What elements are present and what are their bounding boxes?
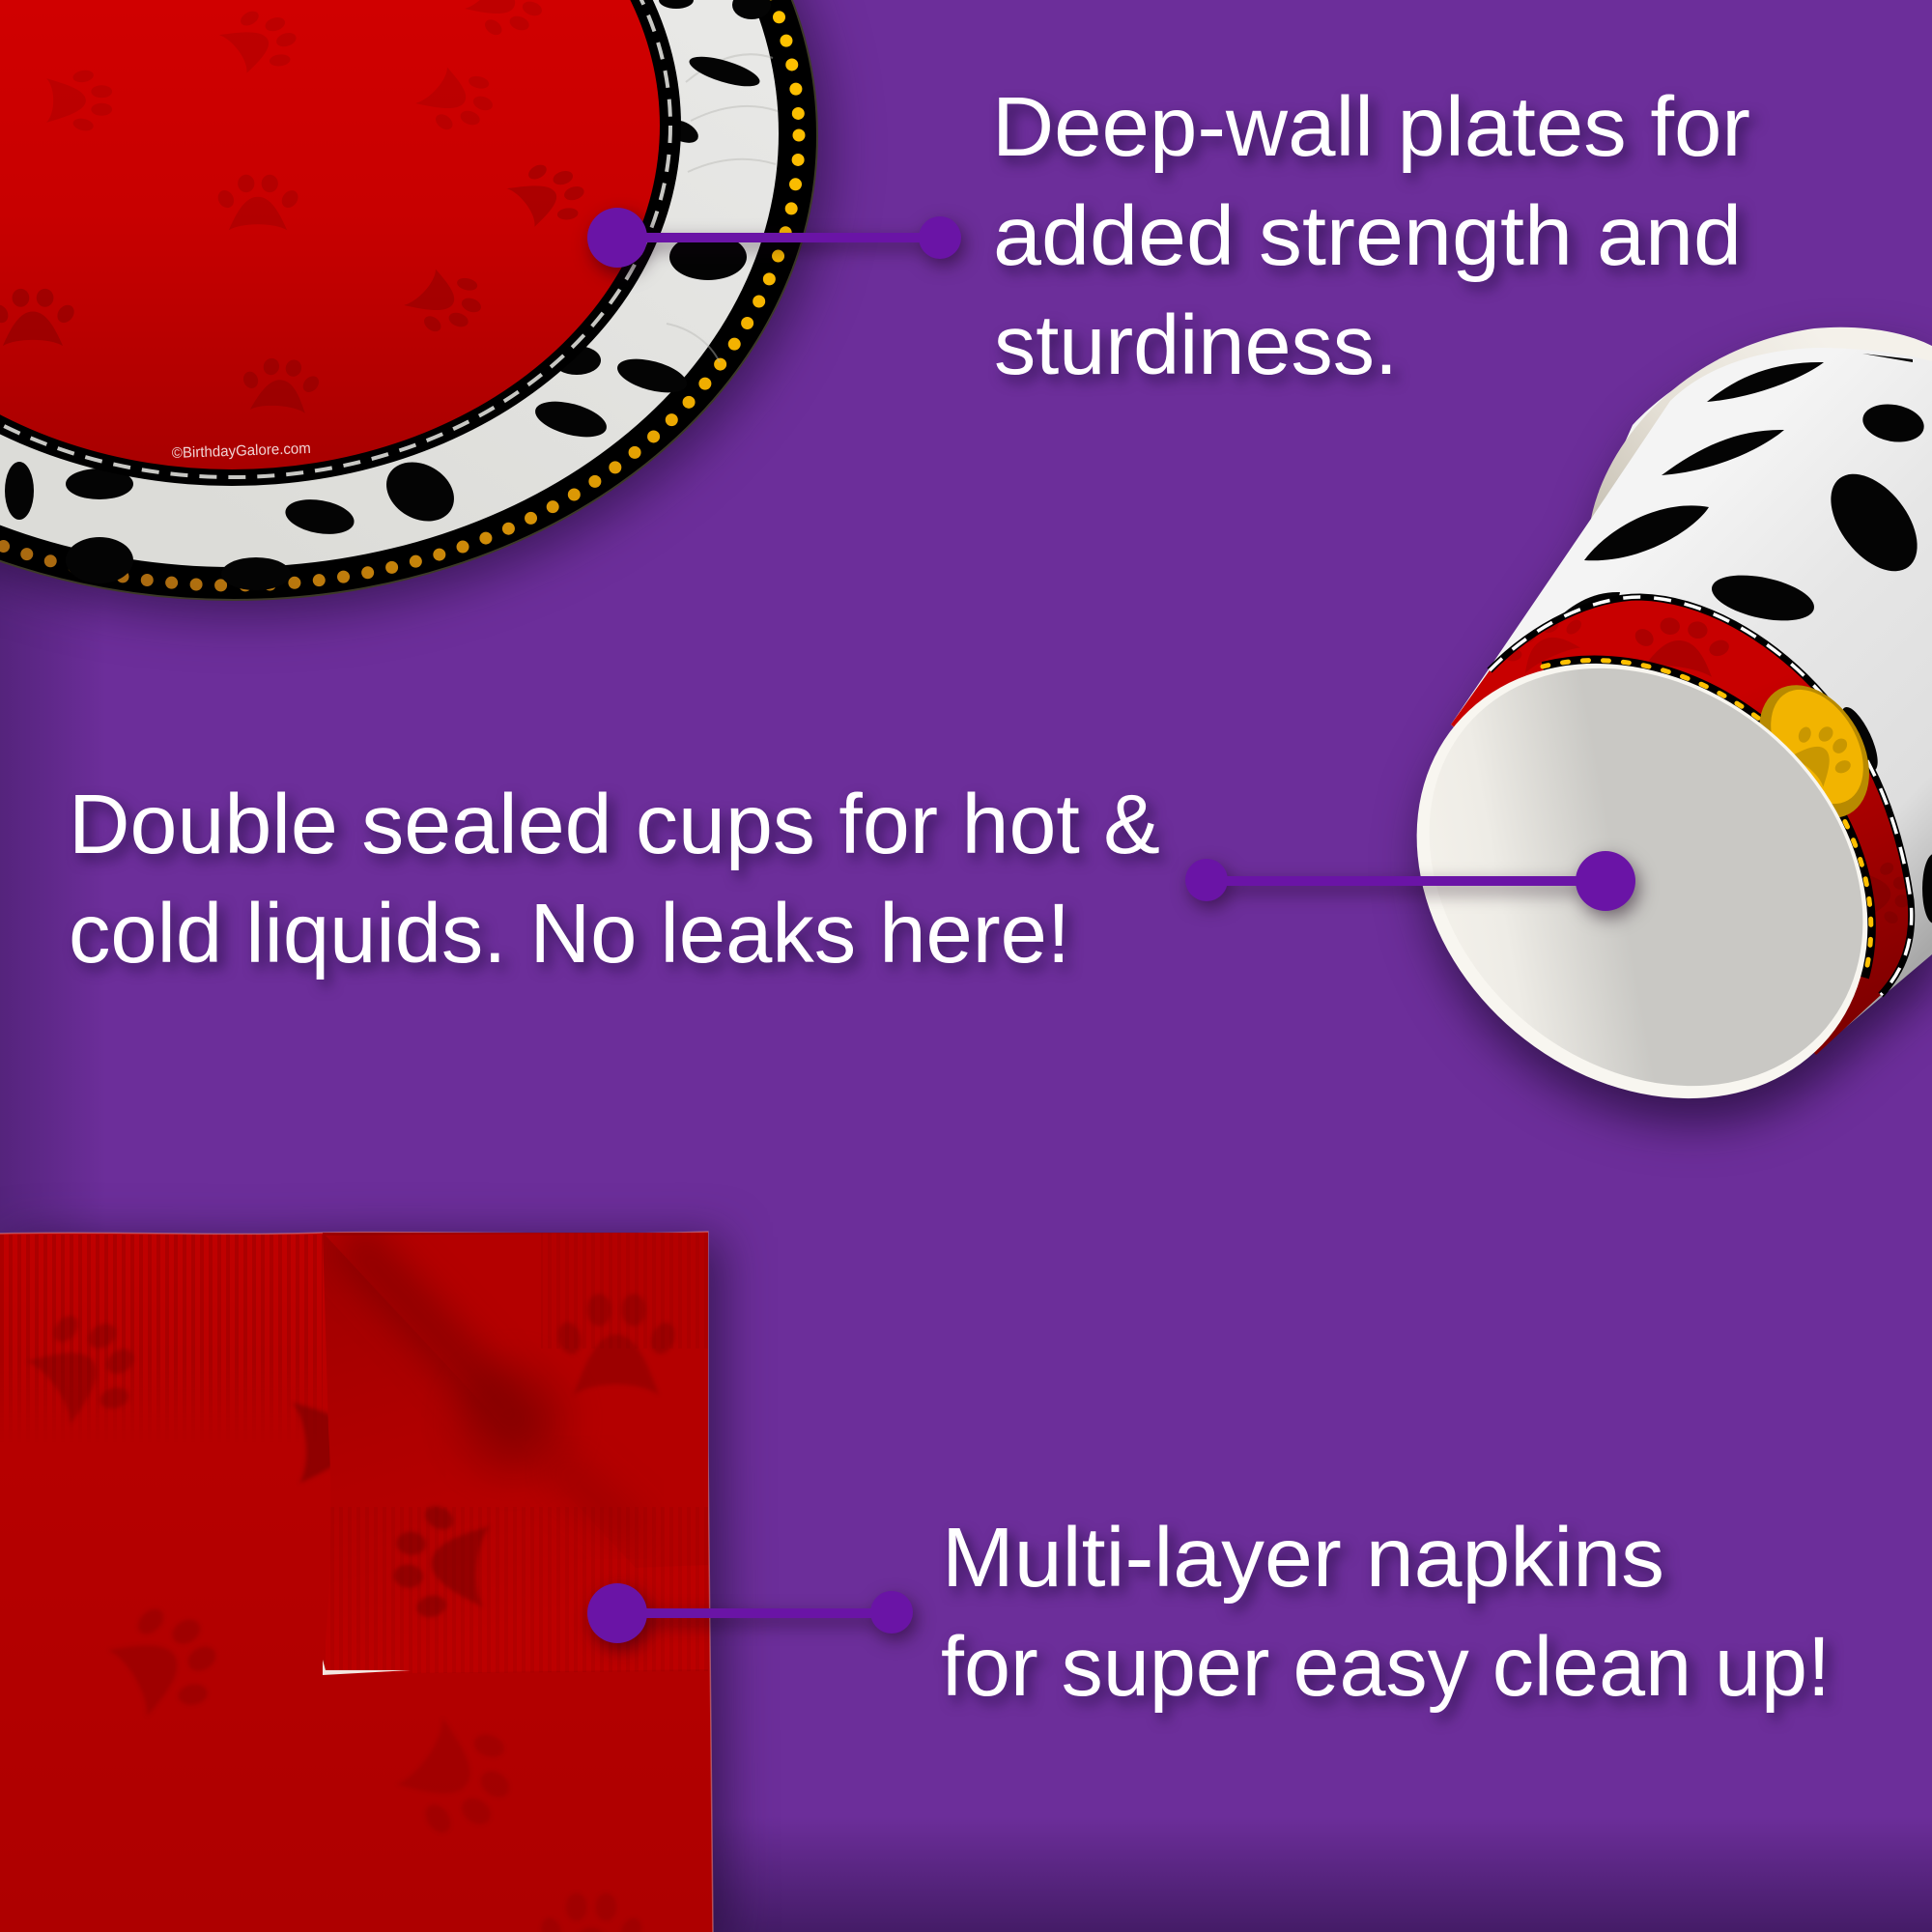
connector: plate (587, 208, 961, 268)
napkin base (0, 1232, 713, 1932)
napkin folded flap (323, 1233, 710, 1676)
cup (1396, 326, 1932, 1150)
napkin flap corner highlight (323, 1660, 411, 1675)
napkin paw prints (16, 1294, 645, 1932)
plate (0, 0, 817, 600)
napkin ribbed band (0, 1235, 323, 1405)
text: napkins: for super easy clean up! (941, 1620, 1831, 1714)
plate dashed stitch (0, 0, 670, 477)
plate red center (0, 0, 660, 469)
text: cups: Double sealed cups for hot & (69, 778, 1160, 871)
cup gold medallion (1737, 666, 1891, 838)
cup interior (1346, 582, 1932, 1173)
cup band stitched edge (1490, 597, 1912, 995)
cup red band (1451, 597, 1912, 1055)
cup top rim (1591, 327, 1932, 519)
cup body (1451, 337, 1932, 1050)
cup black spots (1548, 354, 1932, 923)
plate outer black rim (0, 0, 817, 600)
text: napkins: Multi-layer napkins (942, 1511, 1664, 1605)
plate black spots (5, 0, 771, 590)
text: plates: sturdiness. (994, 298, 1398, 392)
text: cups: cold liquids. No leaks here! (69, 887, 1070, 980)
text: plates (992, 80, 1750, 392)
plate wall wrinkles (667, 54, 778, 362)
cup band paws (1496, 607, 1911, 928)
text: cups (69, 778, 1160, 980)
text: plates: added strength and (993, 189, 1742, 283)
connector: cup (1185, 851, 1635, 911)
plate inner black band (0, 0, 681, 486)
plate paw prints (0, 0, 598, 414)
text: plates: Deep-wall plates for (992, 80, 1750, 174)
cup opening rim (1329, 574, 1932, 1188)
napkin (0, 1232, 713, 1932)
plate white wall (0, 0, 779, 567)
cup dotted edge (1543, 661, 1871, 978)
connector: napkin (587, 1583, 913, 1643)
text: napkins (941, 1511, 1831, 1714)
plate gold dots (0, 0, 799, 585)
plate copyright: ©BirthdayGalore.com (172, 440, 311, 462)
